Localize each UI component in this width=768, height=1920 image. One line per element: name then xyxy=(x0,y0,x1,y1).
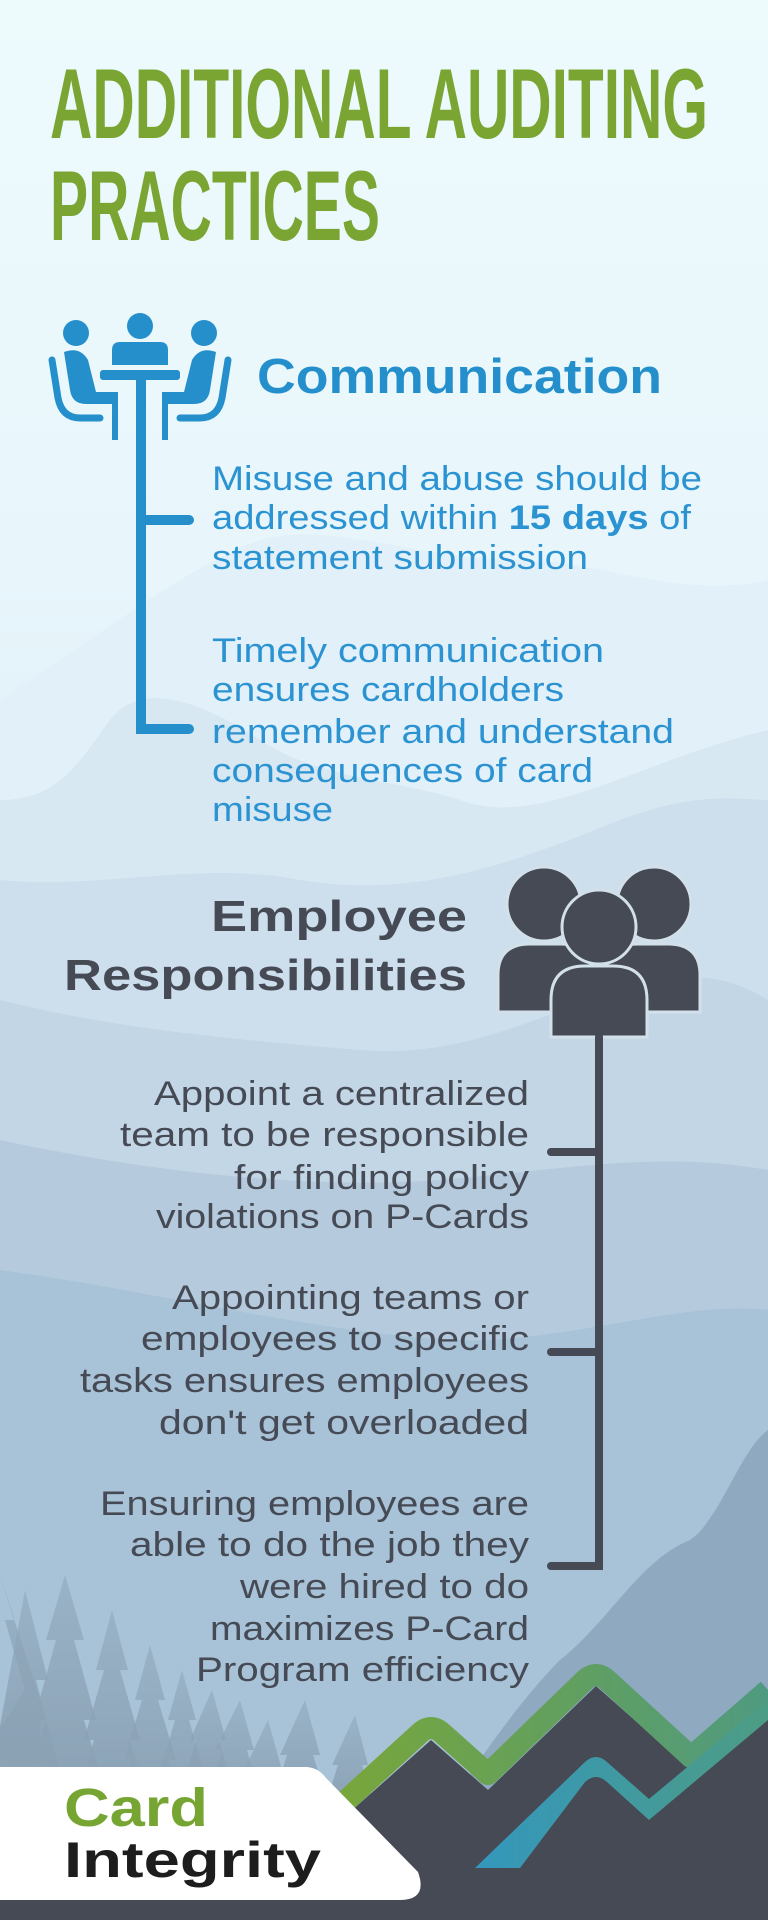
text: employee point 1: for finding policy xyxy=(234,1159,529,1197)
text: communication point 1: addressed within 15 days of xyxy=(212,499,692,537)
text: employee point 1: Appoint a centralized xyxy=(154,1075,529,1113)
text: employee point 3 xyxy=(100,1485,529,1689)
icon: group of people xyxy=(498,867,700,1037)
text: employee point 3: Program efficiency xyxy=(196,1651,529,1689)
text: communication point 2: misuse xyxy=(212,791,333,829)
employee timeline xyxy=(551,1037,599,1566)
text: communication point 2: remember and understand xyxy=(212,713,674,751)
text: communication point 1: statement submission xyxy=(212,539,588,577)
heading: Employee Responsibilities xyxy=(64,892,467,1000)
footer mountains xyxy=(0,1675,768,1920)
logo panel: Card Integrity: Card xyxy=(64,1778,208,1838)
trees xyxy=(0,1560,378,1830)
text: employee point 1 xyxy=(120,1075,529,1236)
icon: meeting people xyxy=(52,313,228,440)
text: employee point 2: Appointing teams or xyxy=(172,1279,529,1317)
heading: Communication: Communication xyxy=(257,350,662,404)
text: employee point 2: tasks ensures employees xyxy=(80,1362,529,1400)
text: employee point 1: team to be responsible xyxy=(120,1116,529,1154)
text: employee point 2 xyxy=(80,1279,529,1442)
logo panel: Card Integrity: Integrity xyxy=(64,1832,321,1888)
text: communication point 2: consequences of card xyxy=(212,752,593,790)
text: employee point 3: able to do the job they xyxy=(130,1526,529,1564)
text: communication point 2: Timely communication xyxy=(212,632,604,670)
text: communication point 2 xyxy=(212,632,674,829)
logo panel: Card Integrity xyxy=(0,1767,421,1900)
text: communication point 1: Misuse and abuse should be xyxy=(212,460,702,498)
text: employee point 3: Ensuring employees are xyxy=(100,1485,529,1523)
text: employee point 1: violations on P-Cards xyxy=(156,1198,529,1236)
title: PRACTICES xyxy=(50,150,380,261)
text: communication point 2: ensures cardholders xyxy=(212,671,564,709)
text: employee point 3: maximizes P-Card xyxy=(210,1610,529,1648)
text: employee point 2: don't get overloaded xyxy=(159,1404,529,1442)
text: employee point 2: employees to specific xyxy=(141,1320,529,1358)
text: communication point 1 xyxy=(212,460,702,577)
text: employee point 3: were hired to do xyxy=(239,1568,529,1606)
communication timeline xyxy=(141,378,189,729)
heading: Employee Responsibilities: Responsibilities xyxy=(64,951,467,1000)
heading: Employee Responsibilities: Employee xyxy=(211,892,467,941)
title xyxy=(50,48,708,261)
